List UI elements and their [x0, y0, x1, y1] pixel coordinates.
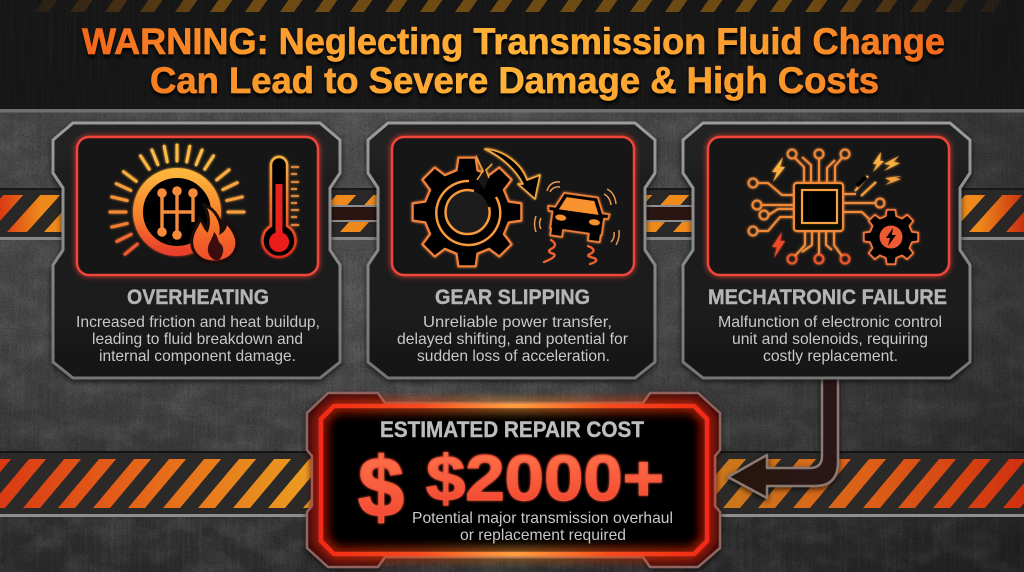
text: cost description: or replacement required [460, 527, 626, 544]
text: overheating description [76, 314, 320, 365]
arrow from mechatronic card to repair cost [728, 376, 838, 498]
top hazard stripe [20, 0, 1010, 12]
panel: estimated repair cost [307, 393, 720, 567]
neon frame [321, 406, 707, 554]
icon: thermometer [263, 157, 299, 257]
panel: mechatronic failure [683, 123, 970, 378]
icon frame [708, 137, 949, 275]
bottom hazard band [0, 451, 1024, 517]
panel: gear slipping [368, 123, 655, 378]
text: overheating description: internal component damage. [99, 348, 296, 365]
icon: skid marks [544, 240, 596, 264]
text: mechatronic description: unit and solenoids, requiring [732, 331, 928, 348]
icon: large dollar sign: $ [358, 440, 404, 534]
icon: curved arrow [485, 149, 540, 199]
text: overheating description: Increased friction and heat buildup, [76, 314, 320, 331]
icon: circuit traces [748, 150, 884, 264]
mid hazard band [0, 188, 1024, 240]
panel: overheating [53, 123, 340, 378]
icon: broken gear [413, 154, 521, 266]
text: mechatronic description: costly replacement. [763, 348, 898, 365]
cost figure: $2000+ [426, 442, 664, 514]
title: Can Lead to Severe Damage & High Costs [150, 60, 879, 101]
icon: overheating gauge with shifter and flame [110, 145, 244, 262]
icon frame [392, 137, 634, 275]
icon: lightning bolts [772, 152, 902, 258]
text: overheating description: leading to fluid breakdown and [92, 331, 303, 348]
heading: overheating: OVERHEATING [127, 286, 269, 309]
text: mechatronic description: Malfunction of electronic control [718, 314, 942, 331]
text: gear slipping description: Unreliable power transfer, [423, 314, 612, 331]
icon: skidding car [544, 191, 612, 243]
title [82, 21, 945, 101]
title: WARNING: Neglecting Transmission Fluid Change [82, 21, 945, 62]
heading: gear slipping: GEAR SLIPPING [435, 286, 590, 309]
header band [0, 0, 1024, 112]
heading: mechatronic failure: MECHATRONIC FAILURE [708, 286, 947, 309]
text: mechatronic description [718, 314, 942, 365]
icon: damaged gear [864, 210, 918, 264]
heading: estimated repair cost: ESTIMATED REPAIR COST [380, 417, 644, 442]
icon: vibration marks [534, 182, 619, 245]
text: gear slipping description: delayed shifting, and potential for [397, 331, 629, 348]
text: gear slipping description: sudden loss of acceleration. [417, 348, 610, 365]
icon: microchip [794, 183, 843, 231]
text: cost description: Potential major transmission overhaul [412, 510, 673, 527]
panel interior [321, 406, 707, 554]
text: cost description [412, 510, 673, 544]
icon frame [77, 137, 318, 275]
text: gear slipping description [397, 314, 629, 365]
